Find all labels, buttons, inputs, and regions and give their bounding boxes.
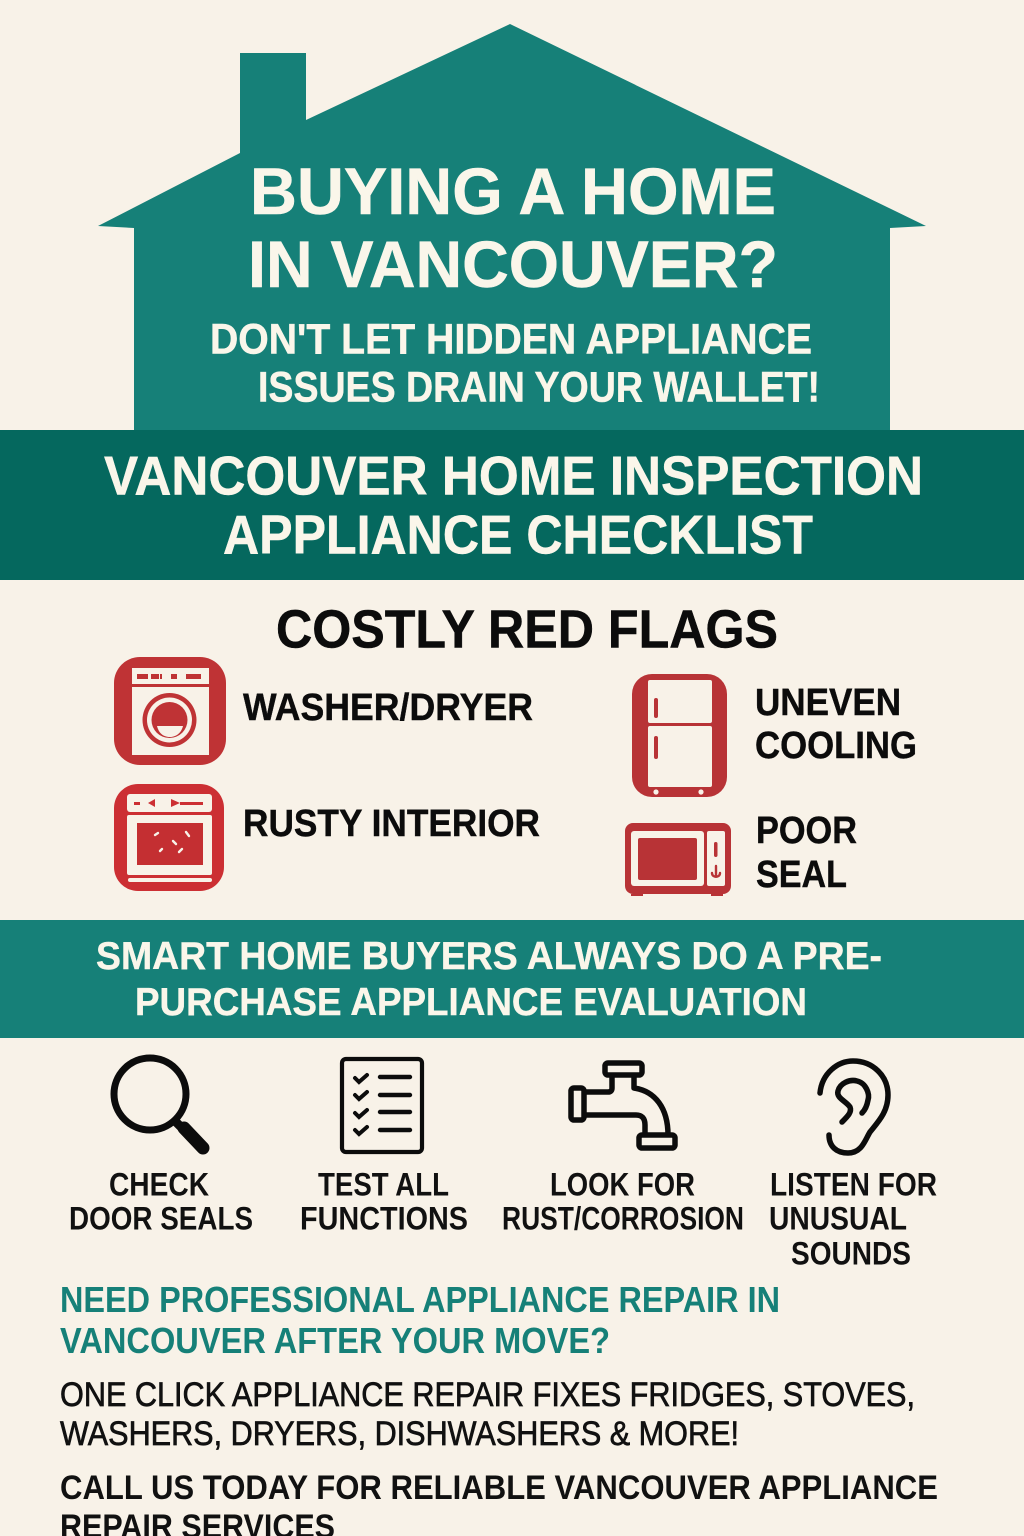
text block: services xyxy=(60,1376,915,1453)
label: poor seal xyxy=(756,810,857,896)
icon: fridge xyxy=(632,674,727,797)
label: rusty interior: RUSTY INTERIOR xyxy=(243,803,540,845)
label: listen for unusual sounds xyxy=(769,1166,937,1272)
text block: repair question: NEED PROFESSIONAL APPLIANCE REPAIR IN xyxy=(60,1279,780,1320)
text block: services: WASHERS, DRYERS, DISHWASHERS & MORE! xyxy=(60,1415,739,1453)
house header xyxy=(98,24,926,431)
title xyxy=(248,154,778,301)
label: listen for unusual sounds: UNUSUAL xyxy=(769,1200,907,1236)
text block: repair question xyxy=(60,1279,780,1361)
title: BUYING A HOME xyxy=(250,154,776,228)
icon: washer xyxy=(114,657,226,765)
label: check door seals: CHECK xyxy=(109,1166,209,1202)
banner: smart home buyers: SMART HOME BUYERS ALWAYS DO A PRE- xyxy=(96,935,882,978)
label: poor seal: SEAL xyxy=(756,854,847,896)
banner: smart home buyers: PURCHASE APPLIANCE EVALUATION xyxy=(135,981,807,1024)
label: uneven cooling: COOLING xyxy=(755,725,917,767)
label: test all functions xyxy=(300,1166,468,1236)
label: uneven cooling xyxy=(755,682,917,767)
text block: services: ONE CLICK APPLIANCE REPAIR FIXES FRIDGES, STOVES, xyxy=(60,1376,915,1414)
banner: checklist heading: VANCOUVER HOME INSPECTION xyxy=(104,444,923,506)
label: check door seals xyxy=(69,1166,253,1236)
icon: oven xyxy=(114,784,224,891)
label: test all functions: TEST ALL xyxy=(318,1166,449,1202)
label: look for rust/corrosion: RUST/CORROSION xyxy=(502,1200,744,1236)
text block: call to action: CALL US TODAY FOR RELIABLE VANCOUVER APPLIANCE xyxy=(60,1469,938,1507)
text block: call to action xyxy=(60,1469,938,1536)
subtitle: ISSUES DRAIN YOUR WALLET! xyxy=(258,364,820,412)
label: look for rust/corrosion: LOOK FOR xyxy=(550,1166,695,1202)
icon: microwave xyxy=(625,823,731,896)
label: check door seals: DOOR SEALS xyxy=(69,1200,253,1236)
label: look for rust/corrosion xyxy=(502,1166,744,1236)
heading: costly red flags: COSTLY RED FLAGS xyxy=(276,600,778,660)
label: uneven cooling: UNEVEN xyxy=(755,682,901,724)
banner: checklist heading: APPLIANCE CHECKLIST xyxy=(223,504,813,566)
label: poor seal: POOR xyxy=(756,810,857,852)
banner: checklist heading xyxy=(0,430,1024,580)
banner: smart home buyers xyxy=(0,920,1024,1038)
subtitle xyxy=(210,316,820,412)
icon: ear xyxy=(820,1061,888,1153)
label: washer/dryer: WASHER/DRYER xyxy=(243,687,533,729)
subtitle: DON'T LET HIDDEN APPLIANCE xyxy=(210,316,812,364)
label: test all functions: FUNCTIONS xyxy=(300,1200,468,1236)
icon: faucet xyxy=(571,1063,675,1148)
text block: repair question: VANCOUVER AFTER YOUR MOVE? xyxy=(60,1320,610,1361)
icon: checklist xyxy=(342,1059,422,1152)
label: listen for unusual sounds: LISTEN FOR xyxy=(770,1166,937,1202)
title: IN VANCOUVER? xyxy=(248,227,778,301)
icon: magnifying glass xyxy=(114,1058,203,1148)
label: listen for unusual sounds: SOUNDS xyxy=(791,1236,911,1272)
